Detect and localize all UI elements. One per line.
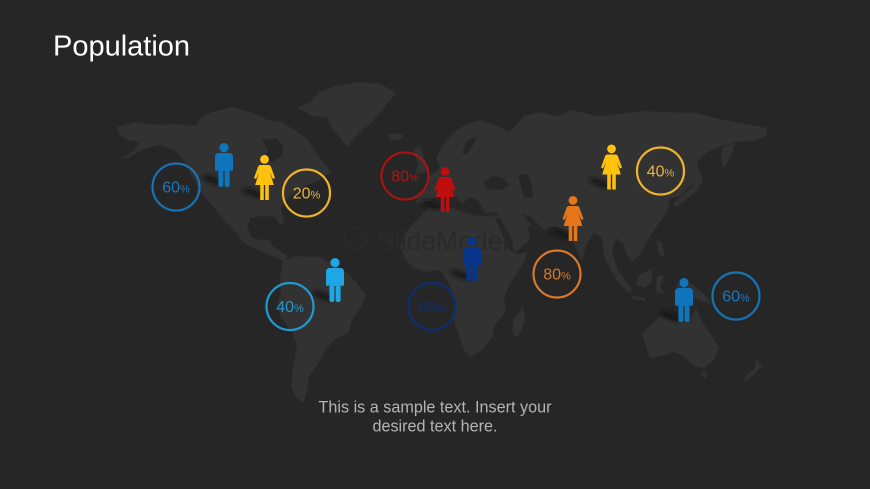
watermark: SlideModel	[377, 226, 508, 256]
badge: 80% India: 80%	[543, 266, 571, 284]
badge: 80% Europe	[382, 152, 428, 200]
map: Sulawesi and Philippines	[656, 240, 665, 294]
badge: 40% Asia	[637, 148, 684, 194]
figure: orange woman, India	[562, 196, 584, 241]
figure: red woman, Europe	[434, 167, 456, 212]
badge: 60% Australia	[712, 272, 760, 320]
figure: yellow woman, North America	[254, 155, 275, 200]
map: Japan	[672, 170, 703, 207]
world map	[117, 82, 767, 403]
badge: 80% Africa	[408, 283, 456, 330]
map: Eurasia	[416, 110, 767, 280]
map: Madagascar	[512, 307, 525, 338]
map: Java	[632, 295, 646, 301]
badge: 80% Africa: 80%	[418, 299, 446, 316]
map: New Guinea	[676, 284, 712, 304]
badge: 20% North America: 20%	[293, 186, 321, 202]
map: Africa	[400, 206, 528, 357]
map: Sakhalin	[721, 143, 735, 168]
figure: yellow woman, Asia	[601, 144, 622, 190]
figure: blue man, Australia	[675, 278, 693, 322]
map: Tasmania	[700, 372, 708, 379]
map: New Zealand	[743, 357, 763, 383]
map: Sumatra	[611, 262, 633, 293]
badge: 40% Asia: 40%	[647, 164, 675, 180]
badge: 20% North America	[283, 170, 330, 216]
map: South America	[278, 256, 366, 403]
figure: blue man, North America	[215, 143, 233, 187]
caption: desired text here.	[372, 418, 498, 436]
badge: 40% South America	[266, 283, 314, 330]
map: inland seas	[250, 137, 540, 253]
badge: 60% North America: 60%	[162, 180, 190, 196]
map: UK	[413, 146, 426, 175]
badge: 60% Australia: 60%	[722, 288, 750, 306]
map: North America	[117, 107, 331, 261]
figure: navy man, Africa	[463, 237, 481, 281]
badge: 80% Europe: 80%	[391, 168, 419, 186]
caption: This is a sample text. Insert your	[318, 398, 552, 416]
figure: cyan man, South America	[326, 258, 344, 302]
shadows	[202, 174, 682, 322]
title: Population	[53, 30, 190, 62]
caption	[318, 398, 552, 436]
map: Greenland	[297, 82, 397, 147]
map: Australia	[642, 308, 719, 368]
badge: 40% South America: 40%	[276, 299, 304, 316]
map: Borneo	[636, 268, 652, 288]
map: Iceland	[387, 133, 404, 140]
badge: 60% North America	[152, 164, 200, 210]
badge: 80% India	[534, 250, 580, 298]
